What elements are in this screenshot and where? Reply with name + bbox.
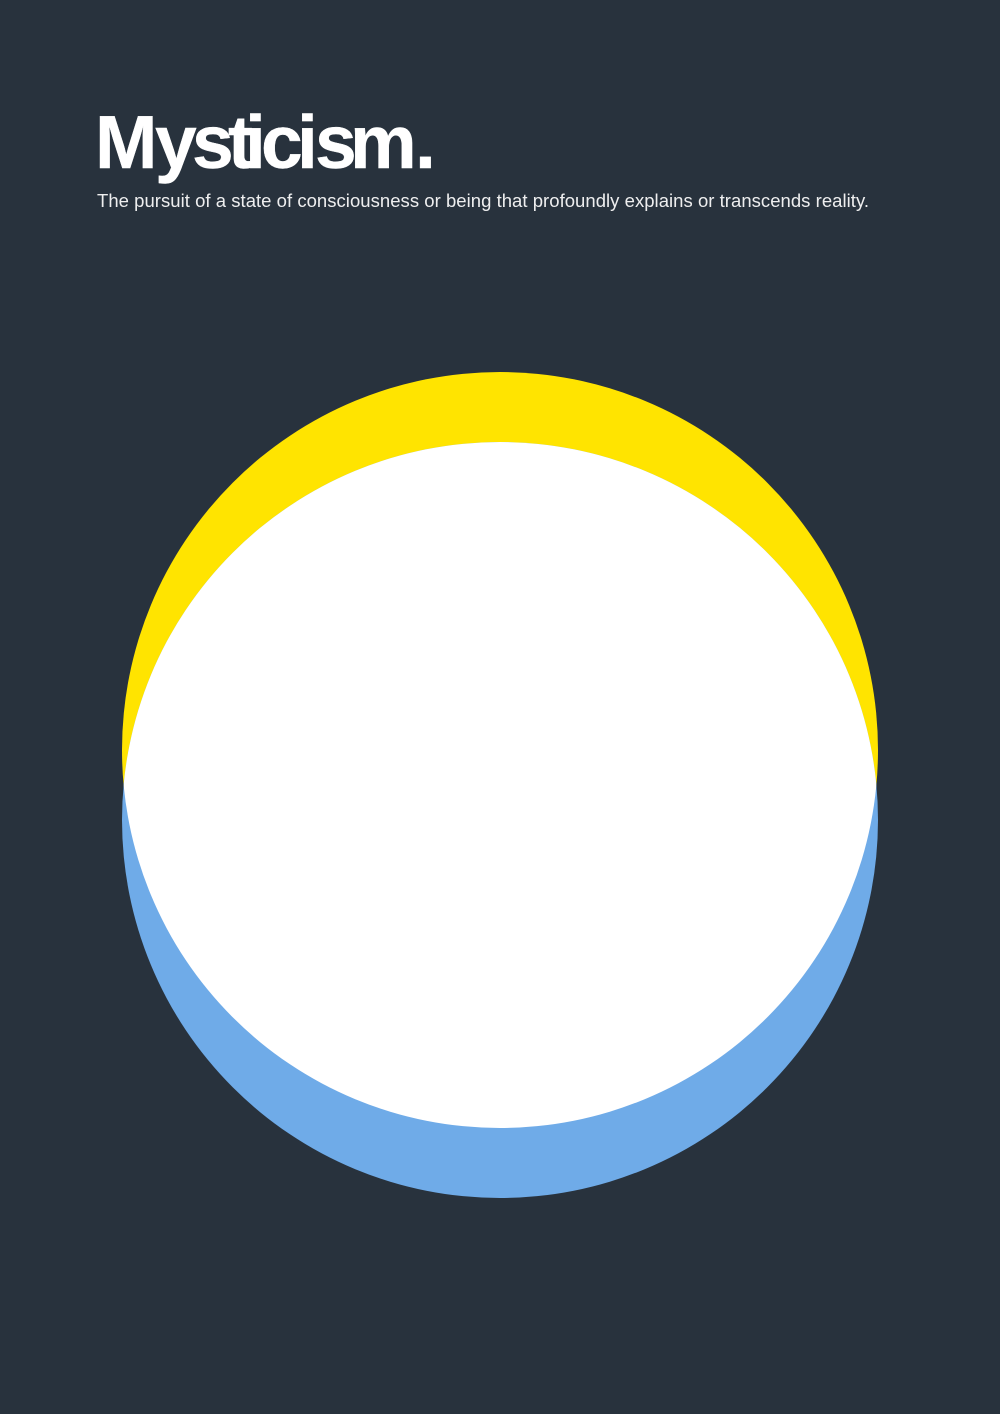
blue circle: [122, 442, 878, 1198]
poster: [97, 113, 878, 1198]
subtitle: The pursuit of a state of consciousness or being that profoundly explains or transcends reality.: [97, 190, 869, 211]
white intersection: [122, 442, 878, 1198]
diagram: overlapping circles: [122, 372, 878, 1198]
title: Mysticism.: [95, 100, 436, 184]
yellow circle: [122, 372, 878, 1128]
